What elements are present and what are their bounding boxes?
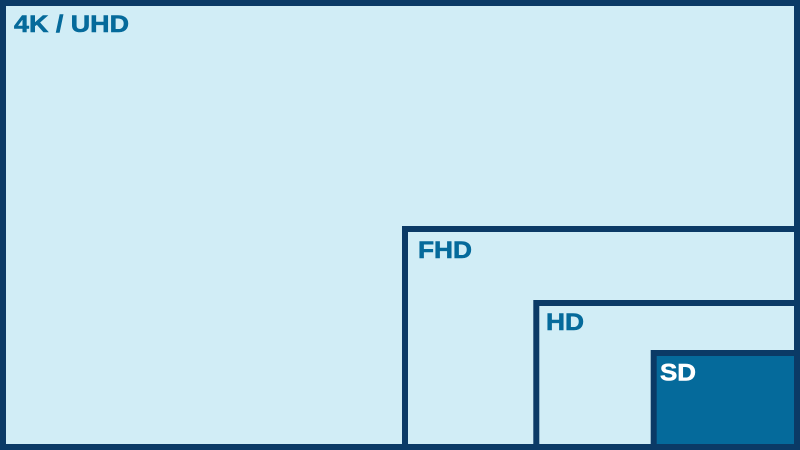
label: HD: HD: [546, 309, 584, 336]
panel: HD frame: [536, 303, 797, 447]
label: 4K / UHD: 4K / UHD: [14, 11, 129, 38]
label: SD: SD: [660, 360, 696, 386]
panel: FHD frame: [405, 229, 797, 447]
label: FHD: FHD: [418, 237, 472, 264]
panel: SD frame: [654, 353, 797, 447]
